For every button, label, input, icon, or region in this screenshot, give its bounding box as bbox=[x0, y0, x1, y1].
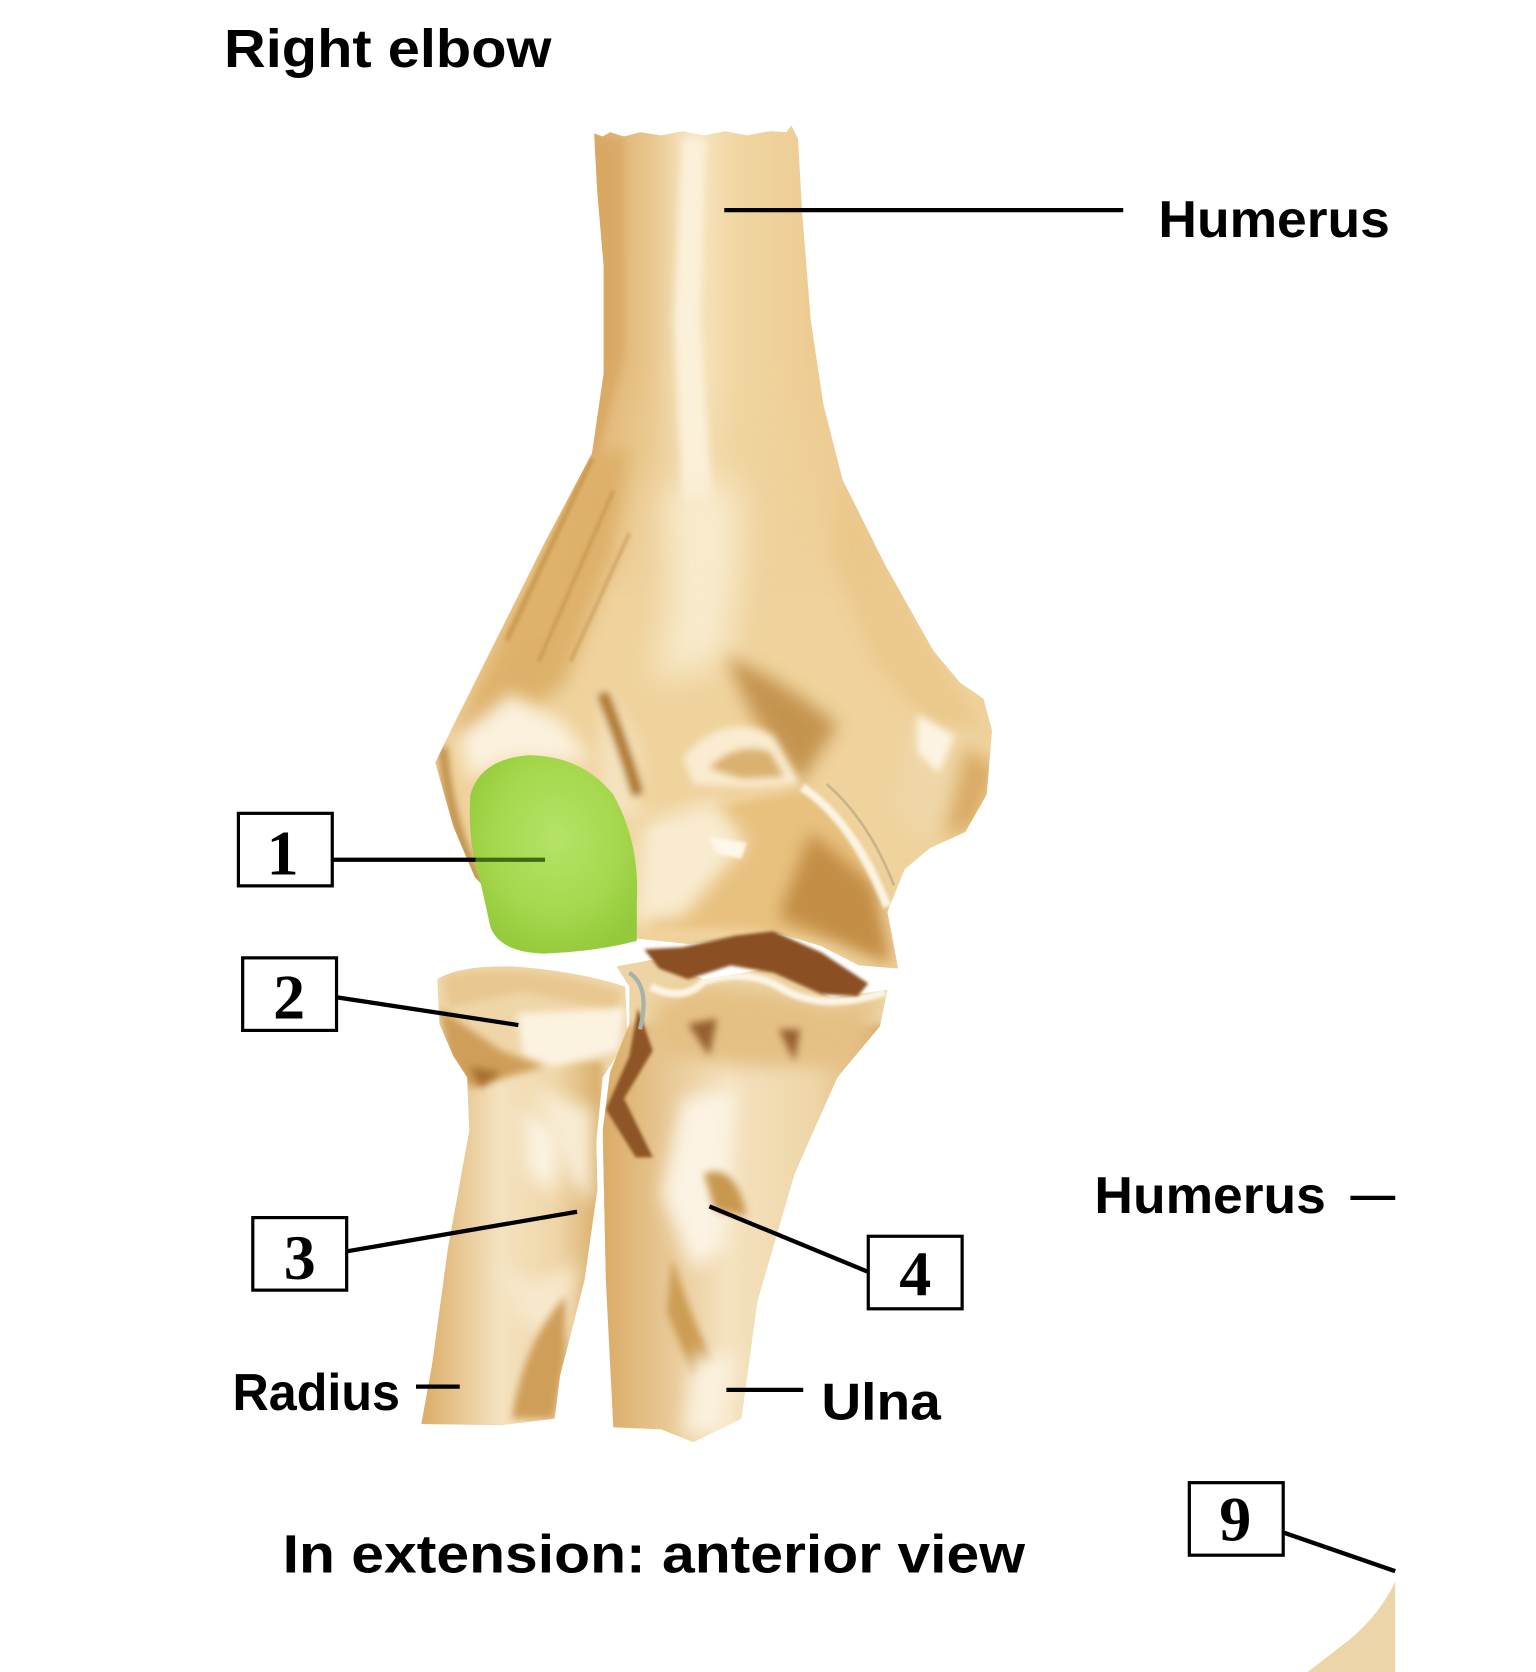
callout 2: 2 bbox=[273, 962, 305, 1033]
highlighted structure: capitulum (green) bbox=[470, 755, 637, 954]
bone: ulna bbox=[597, 960, 887, 1442]
callout 9 bbox=[1189, 1483, 1395, 1571]
label: Radius: Radius bbox=[233, 1364, 400, 1422]
label: Humerus (anterior view): Humerus bbox=[1158, 191, 1390, 249]
joint gap: dark brown articular surface bbox=[644, 931, 868, 996]
callout 3: 3 bbox=[284, 1222, 316, 1293]
label: Humerus (cropped second view): Humerus bbox=[1094, 1167, 1326, 1225]
view caption: In extension: anterior view bbox=[283, 1525, 1026, 1584]
callout 1: 1 bbox=[267, 818, 299, 889]
title: Right elbow: Right elbow bbox=[224, 20, 552, 79]
callout 4 bbox=[709, 1206, 962, 1309]
bone: radius bbox=[416, 966, 627, 1429]
callout 1 bbox=[238, 813, 545, 889]
cropped bone fragment, lower right bbox=[1308, 1582, 1395, 1672]
bone: humerus bbox=[435, 107, 997, 969]
anatomical illustration of the right elbow bbox=[228, 28, 1396, 1672]
label: Ulna: Ulna bbox=[821, 1374, 942, 1432]
callout 3 bbox=[253, 1212, 577, 1293]
callout 2 bbox=[243, 958, 518, 1033]
callout 4: 4 bbox=[899, 1238, 931, 1309]
callout 9: 9 bbox=[1219, 1483, 1251, 1554]
